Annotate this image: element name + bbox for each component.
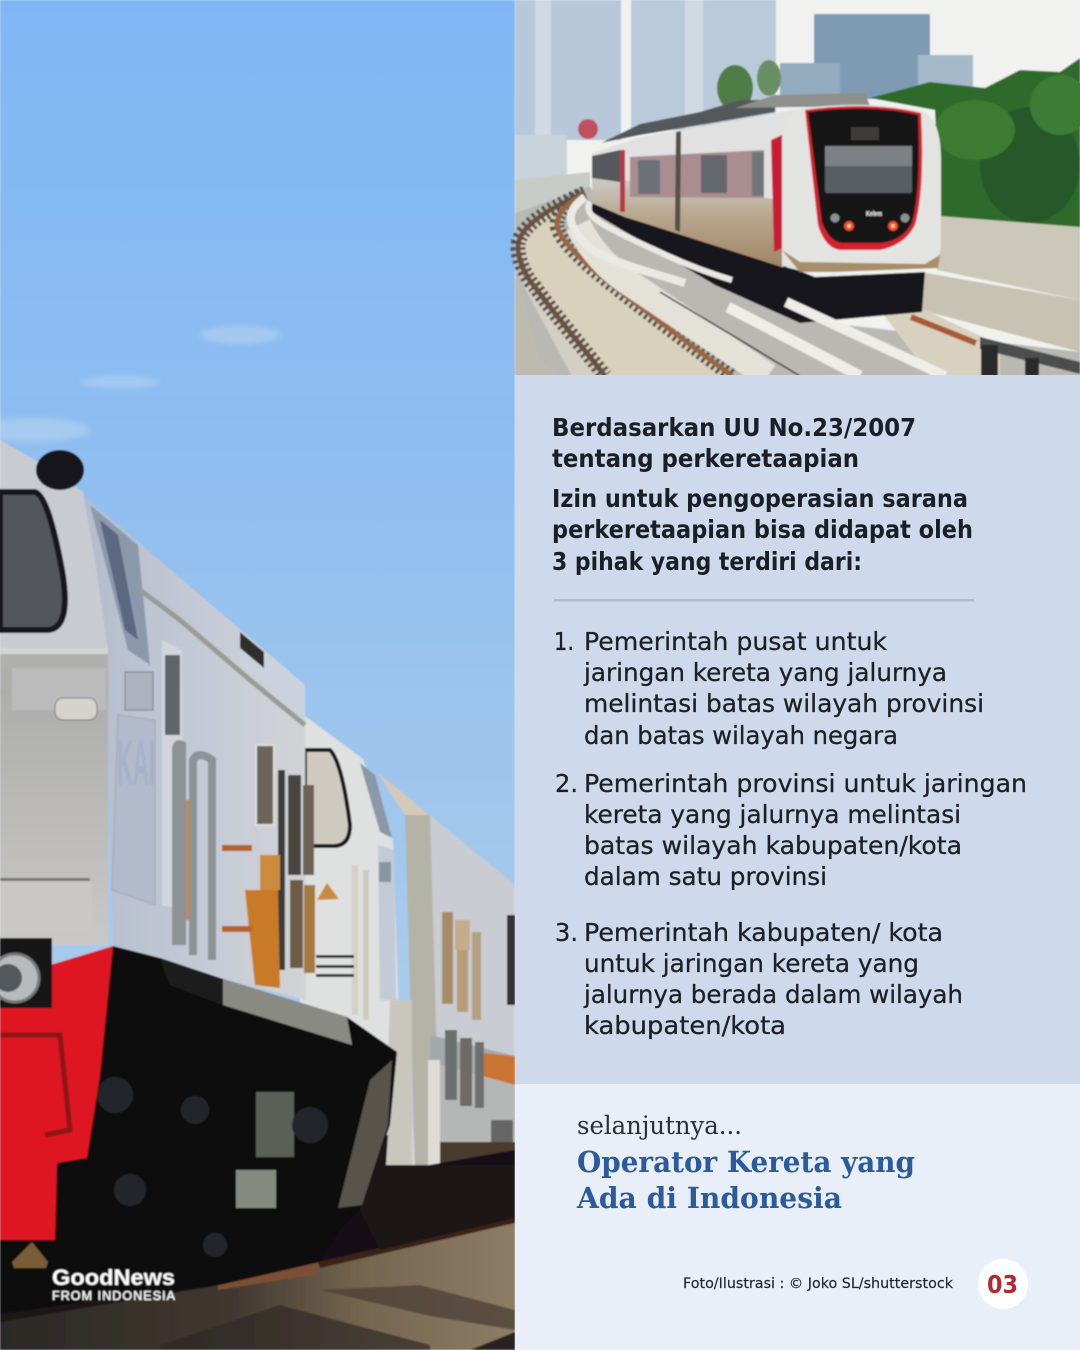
list item 1: melintasi batas wilayah provinsi: [584, 689, 984, 718]
list item 2: [555, 769, 1027, 891]
list item 1: dan batas wilayah negara: [584, 721, 898, 750]
list item 2: Pemerintah provinsi untuk jaringan: [584, 769, 1027, 798]
list item 3: [555, 918, 963, 1040]
cab window: [0, 492, 65, 630]
list item 1: [554, 627, 984, 750]
heading: permit holders intro: [552, 484, 973, 576]
list item 3: untuk jaringan kereta yang: [584, 949, 919, 978]
locomotive undercarriage: [0, 946, 397, 1312]
panel: main text background: [515, 375, 1080, 1085]
LRT train: Kelem: [866, 211, 882, 218]
tracks and guide rails: [518, 193, 976, 376]
list item 1: 1.: [554, 627, 574, 656]
ground ballast and rail: [0, 1150, 515, 1350]
list item 1: jaringan kereta yang jalurnya: [583, 658, 947, 687]
list item 2: kereta yang jalurnya melintasi: [584, 800, 961, 829]
page number badge: 03: [987, 1270, 1018, 1299]
logo: GoodNews From Indonesia: FROM INDONESIA: [52, 1289, 176, 1303]
logo: GoodNews From Indonesia: GoodNews: [52, 1265, 175, 1290]
next topic title: [576, 1145, 915, 1215]
heading: permit holders intro: perkeretaapian bisa didapat oleh: [552, 515, 973, 544]
logo: GoodNews From Indonesia: [52, 1265, 176, 1303]
list item 2: 2.: [555, 769, 578, 798]
carriage: [378, 773, 515, 1170]
list item 3: 3.: [555, 918, 578, 947]
list item 3: jalurnya berada dalam wilayah: [583, 980, 963, 1009]
next topic title: Ada di Indonesia: [576, 1181, 842, 1215]
cab side windows and orange panel: [185, 745, 315, 988]
list item 2: dalam satu provinsi: [584, 862, 827, 891]
heading: permit holders intro: Izin untuk pengoperasian sarana: [552, 484, 968, 513]
trees: [717, 58, 1080, 232]
concrete walls and deck: [515, 172, 1080, 376]
red nose: [0, 946, 113, 1240]
background buildings: [515, 0, 973, 183]
first locomotive hood: [85, 497, 315, 1000]
panel: next topic background: [515, 1084, 1080, 1350]
heading: law reference: [552, 413, 916, 473]
foreground barrier: [980, 337, 1080, 376]
first locomotive hood: KAI: [117, 727, 155, 799]
heading: law reference: tentang perkeretaapian: [552, 444, 859, 473]
list item 3: Pemerintah kabupaten/ kota: [584, 918, 943, 947]
carriage underframe: [360, 1135, 515, 1250]
list item 2: batas wilayah kabupaten/kota: [584, 831, 962, 860]
train front face: [782, 105, 941, 270]
page number badge: [978, 1259, 1028, 1309]
heading: law reference: Berdasarkan UU No.23/2007: [552, 413, 916, 442]
photo credit: Foto/Ilustrasi : © Joko SL/shutterstock: [683, 1276, 954, 1292]
top right photo: LRT train on elevated track: [515, 0, 1080, 376]
list item 3: kabupaten/kota: [584, 1011, 786, 1040]
next topic label: selanjutnya...: [577, 1111, 742, 1140]
next topic title: Operator Kereta yang: [577, 1145, 915, 1179]
heading: permit holders intro: 3 pihak yang terdiri dari:: [552, 547, 862, 576]
locomotive cab front: [0, 440, 113, 1240]
second locomotive: [300, 716, 412, 1165]
LRT train: [592, 93, 941, 323]
handrails: [176, 744, 212, 960]
list item 1: Pemerintah pusat untuk: [584, 627, 888, 656]
left photo: locomotive under blue sky: [0, 0, 515, 1350]
